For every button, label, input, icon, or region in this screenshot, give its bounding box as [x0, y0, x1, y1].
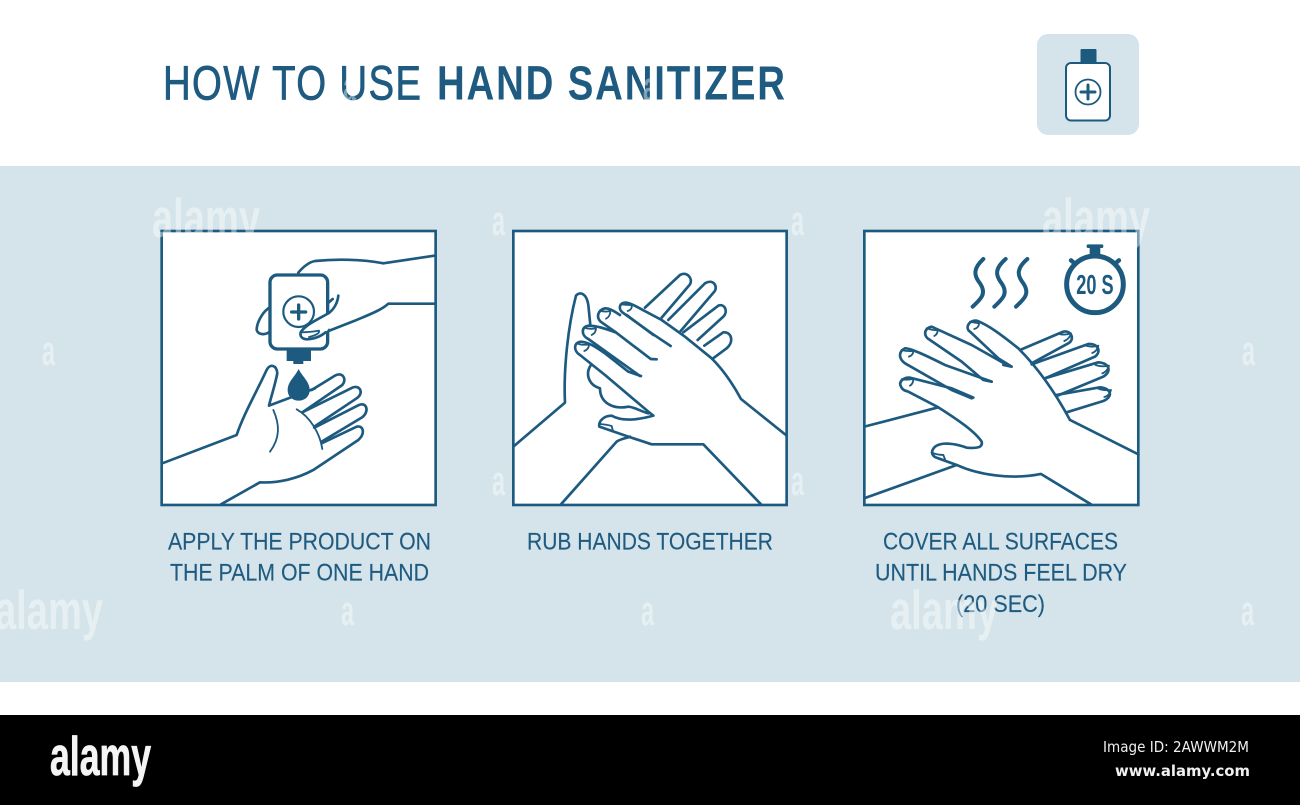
watermarks: alamy [152, 187, 260, 249]
front hand [900, 321, 1138, 504]
watermarks: a [492, 457, 505, 504]
panel: cover all surfaces [864, 231, 1138, 505]
icon: sanitizer bottle [1037, 34, 1139, 135]
title: HOW TO USE [163, 58, 421, 111]
watermarks: a [641, 587, 654, 634]
foam [588, 365, 648, 413]
blue background band [0, 166, 1300, 682]
panel: apply the product [162, 231, 436, 505]
panel frame [162, 231, 436, 505]
caption: step 3 [875, 528, 1127, 618]
back hand fingers [1020, 331, 1111, 412]
caption: step 1 [168, 528, 431, 586]
watermarks: a [343, 63, 356, 110]
watermarks [0, 63, 1255, 641]
caption: step 1: APPLY THE PRODUCT ON [168, 528, 431, 556]
footer image id [1103, 738, 1250, 780]
icon: sanitizer drop [288, 369, 310, 401]
title: HAND SANITIZER [437, 58, 785, 111]
thumb on bottle [300, 312, 332, 339]
watermarks: alamy [890, 579, 998, 641]
icon: stopwatch [1067, 244, 1123, 313]
watermarks: a [42, 327, 55, 374]
panel: rub hands together [513, 231, 787, 505]
watermarks: a [1241, 587, 1254, 634]
lower open hand [162, 366, 315, 463]
footer logo: alamy [50, 725, 151, 787]
watermarks: alamy [1042, 187, 1150, 249]
icon: stopwatch: 20 S [1076, 269, 1114, 300]
watermarks: a [791, 457, 804, 504]
watermarks: a [341, 587, 354, 634]
icon: heat waves [973, 259, 1027, 307]
upper hand holding bottle [257, 256, 434, 364]
watermarks: a [492, 197, 505, 244]
caption: step 2: RUB HANDS TOGETHER [527, 528, 773, 556]
watermarks: a [643, 63, 656, 110]
caption: step 3: UNTIL HANDS FEEL DRY [875, 560, 1127, 586]
lower arm [561, 437, 630, 504]
watermarks: a [1242, 327, 1255, 374]
title [163, 58, 785, 111]
panel frame [513, 231, 787, 505]
back arm [864, 407, 957, 498]
black footer bar [0, 715, 1300, 805]
sanitizer bottle [270, 275, 328, 364]
back hand fingers [645, 274, 731, 359]
watermarks: a [791, 197, 804, 244]
back hand and thumb [513, 293, 590, 447]
caption: step 1: THE PALM OF ONE HAND [170, 560, 429, 586]
panel frame [864, 231, 1138, 505]
footer image id: Image ID: 2AWWM2M [1103, 738, 1249, 756]
footer image id: www.alamy.com [1115, 762, 1250, 780]
caption: step 3: COVER ALL SURFACES [883, 528, 1118, 556]
caption: step 3: (20 SEC) [956, 591, 1045, 618]
front hand [575, 303, 787, 504]
